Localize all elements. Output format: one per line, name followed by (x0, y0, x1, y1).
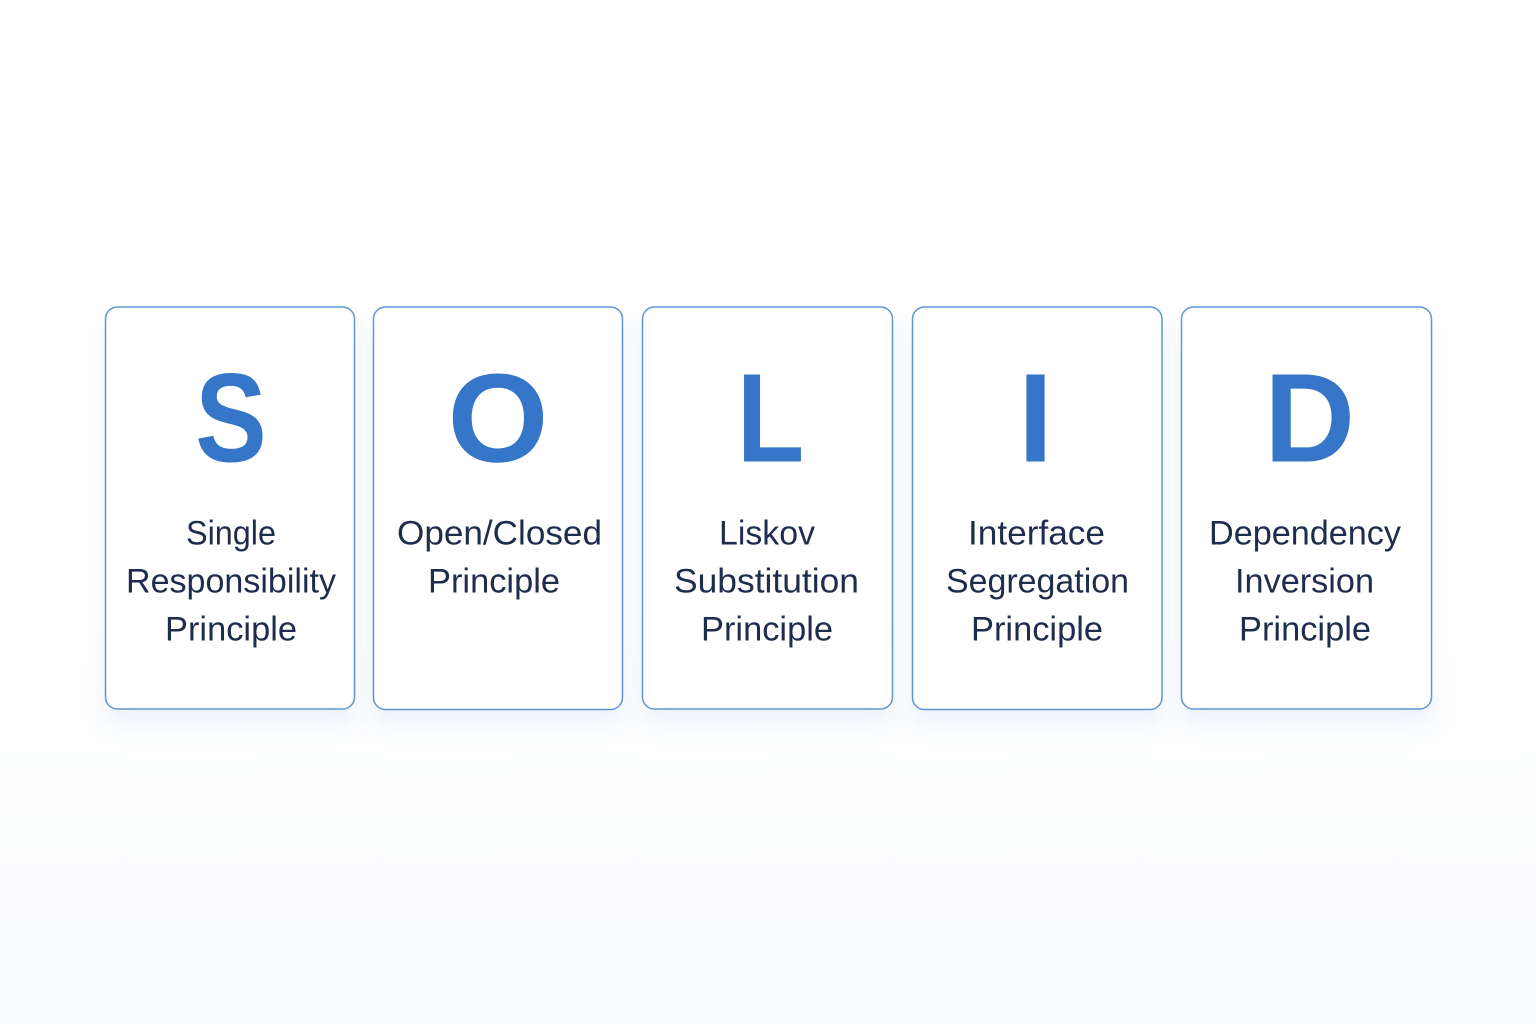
letter O: O (448, 348, 548, 489)
card: I, Interface Segregation Principle (912, 307, 1162, 710)
label: Dependency Inversion Principle (1209, 514, 1401, 648)
label: Interface Segregation Principle: Interface (968, 514, 1105, 552)
label: Single Responsibility Principle: Single (186, 514, 276, 552)
label: Single Responsibility Principle (126, 514, 336, 648)
label: Open/Closed Principle: Principle (428, 562, 560, 600)
label: Open/Closed Principle: Open/Closed (397, 514, 602, 552)
label: Single Responsibility Principle: Responsibility (126, 562, 336, 600)
letter S: S (195, 347, 267, 488)
label: Interface Segregation Principle: Segregation (946, 562, 1129, 600)
card: O, Open/Closed Principle (374, 307, 622, 710)
label: Open/Closed Principle (397, 514, 602, 600)
label: Liskov Substitution Principle: Liskov (719, 514, 815, 552)
label: Dependency Inversion Principle: Dependency (1209, 514, 1401, 552)
label: Liskov Substitution Principle: Substitution (674, 562, 859, 600)
label: Liskov Substitution Principle: Principle (701, 610, 833, 648)
card: D, Dependency Inversion Principle (1182, 307, 1432, 709)
label: Interface Segregation Principle: Principle (971, 610, 1103, 648)
label: Single Responsibility Principle: Principle (165, 610, 297, 648)
letter L: L (737, 349, 804, 489)
card: L, Liskov Substitution Principle (642, 307, 892, 709)
letter D: D (1264, 348, 1355, 488)
letter I: I (1018, 348, 1053, 488)
card: S, Single Responsibility Principle (106, 307, 354, 709)
label: Liskov Substitution Principle (674, 514, 859, 648)
label: Dependency Inversion Principle: Inversion (1235, 562, 1374, 600)
label: Interface Segregation Principle (946, 514, 1129, 648)
label: Dependency Inversion Principle: Principle (1239, 610, 1371, 648)
